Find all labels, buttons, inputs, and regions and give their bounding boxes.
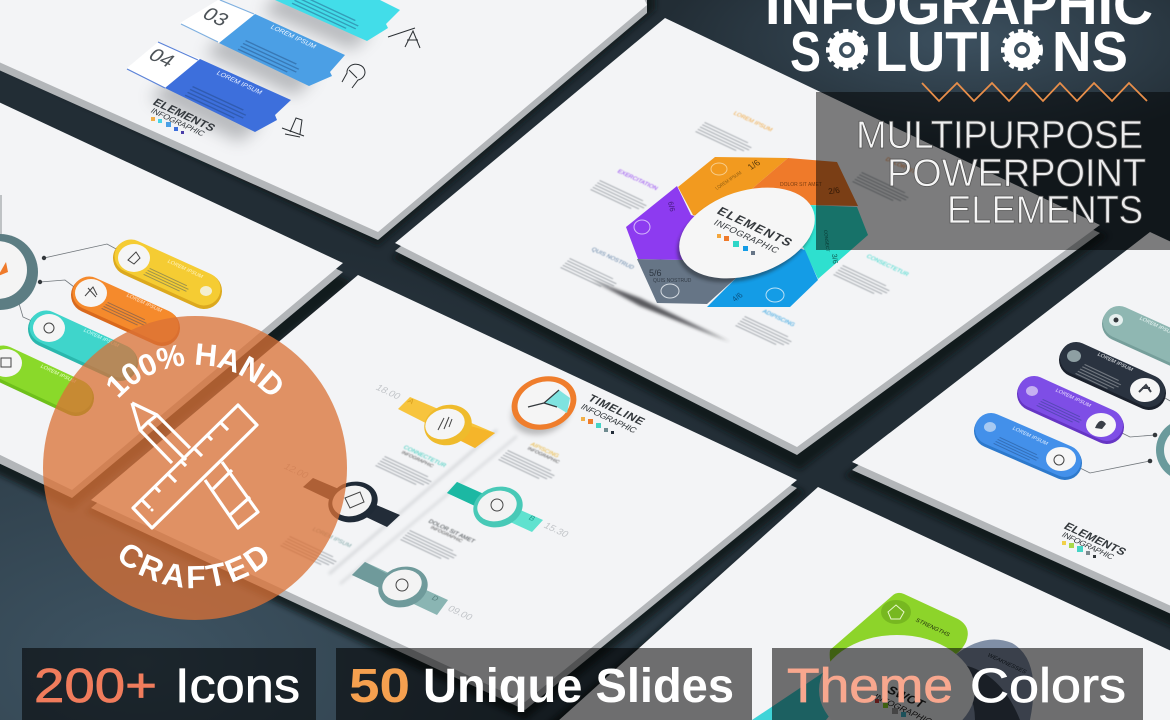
badge: 100% hand crafted	[43, 316, 347, 620]
panel: timeline slide	[85, 275, 805, 720]
centre ellipse: SWOT	[884, 684, 928, 711]
timeline item D: D	[430, 594, 441, 603]
stat box: theme colors	[772, 648, 1143, 720]
title: infographic solutions	[765, 0, 1153, 84]
label: elements infographic: INFOGRAPHIC	[149, 107, 207, 138]
stat box: 200+ icons	[22, 648, 316, 720]
pill: teal: LOREM IPSUM	[82, 328, 120, 349]
segment: dark orange 2/6	[747, 158, 858, 232]
timeline captions: LOREM IPSUM	[311, 527, 352, 549]
title: infographic solutions: S	[790, 20, 821, 84]
stat box: 50 unique slides: 50	[349, 660, 410, 713]
segment: slate 5/6: 5/6	[649, 268, 662, 278]
ribbon: 04: 04	[144, 45, 179, 72]
timeline item C	[281, 462, 400, 528]
timeline captions: DOLOR SIT AMET	[427, 519, 476, 545]
centre ellipse: ELEMENTS	[714, 205, 795, 249]
segment: slate 5/6: QUIS NOSTRUD	[653, 278, 692, 284]
hexagon captions: EXERCITATION	[616, 169, 659, 192]
segment: purple 6/6: 6/6	[666, 200, 677, 212]
segment: blue 4/6: 4/6	[730, 291, 745, 303]
pill: purple	[1026, 386, 1116, 437]
hexagon captions: ADIPISCING	[761, 309, 796, 328]
segment: green strengths	[830, 593, 968, 680]
label: elements infographic: INFOGRAPHIC	[1060, 531, 1116, 561]
hexagon captions: LOREM IPSUM	[732, 111, 773, 133]
segment: purple 6/6	[626, 186, 747, 260]
timeline item D	[352, 561, 475, 623]
stat box: theme colors: Theme	[787, 660, 953, 713]
pill: yellow	[118, 244, 212, 296]
pill: dark	[1067, 350, 1160, 402]
stat box: 200+ icons: 200+	[34, 660, 157, 713]
title: infographic solutions: NS	[1052, 20, 1128, 84]
zigzag divider	[922, 83, 1147, 101]
hexagon captions: DOLOR SIT	[884, 157, 917, 175]
pill: orange	[75, 279, 163, 328]
panel: multipurpose subtitle box: MULTIPURPOSE	[856, 114, 1143, 157]
badge text bottom: CRAFTED	[120, 544, 268, 588]
panel: centre slide with hexagon	[392, 18, 1108, 470]
pill: blue: LOREM IPSUM	[1011, 426, 1049, 447]
pill: orange: LOREM IPSUM	[125, 293, 163, 314]
label: timeline infographic: TIMELINE	[585, 393, 648, 428]
timeline captions	[280, 442, 561, 569]
hexagon captions: CONSECTETUR	[865, 254, 910, 278]
panel: left slide with pills	[0, 98, 352, 510]
big ring	[1156, 419, 1170, 481]
pill: yellow: LOREM IPSUM	[166, 259, 204, 280]
timeline captions: INFOGRAPHIC	[429, 525, 464, 544]
ribbon shadows	[150, 0, 372, 142]
panel: bottom-right SWOT slide	[540, 487, 1170, 720]
ribbon: 03	[180, 0, 345, 86]
segment: blue 4/6	[707, 232, 818, 307]
clock	[505, 368, 583, 442]
ribbon: 03: LOREM IPSUM	[269, 24, 318, 50]
timeline item A: A	[406, 397, 417, 406]
panel: multipurpose subtitle box: ELEMENTS	[947, 189, 1143, 232]
pill: purple: LOREM IPSUM	[1054, 388, 1092, 409]
label: elements infographic: ELEMENTS	[1061, 521, 1129, 558]
pill: teal	[33, 314, 120, 363]
timeline item B	[447, 481, 571, 540]
icons: line icons	[282, 28, 420, 137]
icon: gear letter O second: O	[1006, 26, 1040, 75]
icon: gear letter O: O	[831, 26, 865, 75]
connector lines	[1, 195, 118, 322]
segment: slate 5/6	[637, 232, 747, 304]
timeline item B: B	[527, 514, 537, 523]
title: infographic solutions: LUTI	[875, 20, 992, 84]
timeline captions: INFOGRAPHIC	[526, 446, 561, 465]
ribbon: 04: LOREM IPSUM	[215, 70, 264, 96]
segment: green strengths: STRENGTHS	[914, 618, 951, 638]
panel: multipurpose subtitle box: POWERPOINT	[887, 152, 1146, 195]
pill: blue	[984, 422, 1076, 471]
big ring	[0, 234, 38, 310]
pill: dark: LOREM IPSUM	[1096, 352, 1134, 373]
badge text top: 100% HAND	[107, 343, 282, 398]
icon: pencil and ruler	[132, 403, 258, 528]
segment: teal 3/6: 3/6	[830, 253, 840, 264]
label: elements infographic: ELEMENTS	[150, 97, 218, 134]
timeline item C: 12.00	[281, 462, 311, 481]
segment: orange 1/6: LOREM IPSUM	[714, 170, 743, 191]
centre axis slit	[329, 430, 517, 584]
centre ellipse	[665, 171, 827, 299]
segment: slate weaknesses: WEAKNESSES	[986, 653, 1027, 675]
timeline item A: 18.00	[373, 383, 403, 402]
timeline captions: AIPISCING	[529, 442, 560, 459]
segment: slate weaknesses	[950, 639, 1033, 720]
hexagon captions: QUIS NOSTRUD	[590, 247, 635, 271]
timeline item D: 09.00	[445, 604, 475, 623]
timeline captions: INFOGRAPHIC	[400, 450, 435, 469]
timeline captions: CONNECTETUR	[402, 445, 447, 469]
timeline item B: 15.30	[541, 521, 571, 540]
hexagon shadow	[592, 280, 730, 342]
stat box: 50 unique slides	[336, 648, 752, 720]
connector lines	[1080, 398, 1170, 473]
stat box: theme colors: Colors	[970, 660, 1126, 713]
pill: green: LOREM IPSUM	[39, 364, 77, 385]
pill: sage	[1109, 314, 1170, 357]
ribbon: 03: 03	[198, 4, 233, 31]
segment: orange 1/6	[678, 157, 788, 232]
panel: top-left slide	[0, 0, 655, 246]
hexagon captions	[560, 111, 917, 349]
ribbon: top cyan	[275, 0, 400, 41]
segment: dark orange 2/6: 2/6	[827, 186, 841, 196]
panel: right slide with pills	[844, 232, 1170, 630]
panel: multipurpose subtitle box	[816, 92, 1170, 250]
centre ellipse: INFOGRAPHIC	[712, 218, 781, 255]
segment: orange 1/6: 1/6	[745, 158, 763, 171]
timeline item A	[373, 383, 495, 451]
centre ellipse	[819, 635, 975, 720]
pill: green	[0, 349, 77, 398]
segment: teal 3/6	[747, 205, 868, 279]
segment: teal threats	[752, 668, 856, 720]
label: timeline infographic: INFOGRAPHIC	[579, 402, 639, 435]
segment: dark orange 2/6: DOLOR SIT AMET	[780, 182, 822, 188]
stat box: 50 unique slides: Unique Slides	[423, 660, 734, 713]
segment: teal 3/6: CONSECT	[823, 230, 830, 252]
stat box: 200+ icons: Icons	[175, 660, 300, 713]
ribbon: 04	[127, 42, 291, 132]
